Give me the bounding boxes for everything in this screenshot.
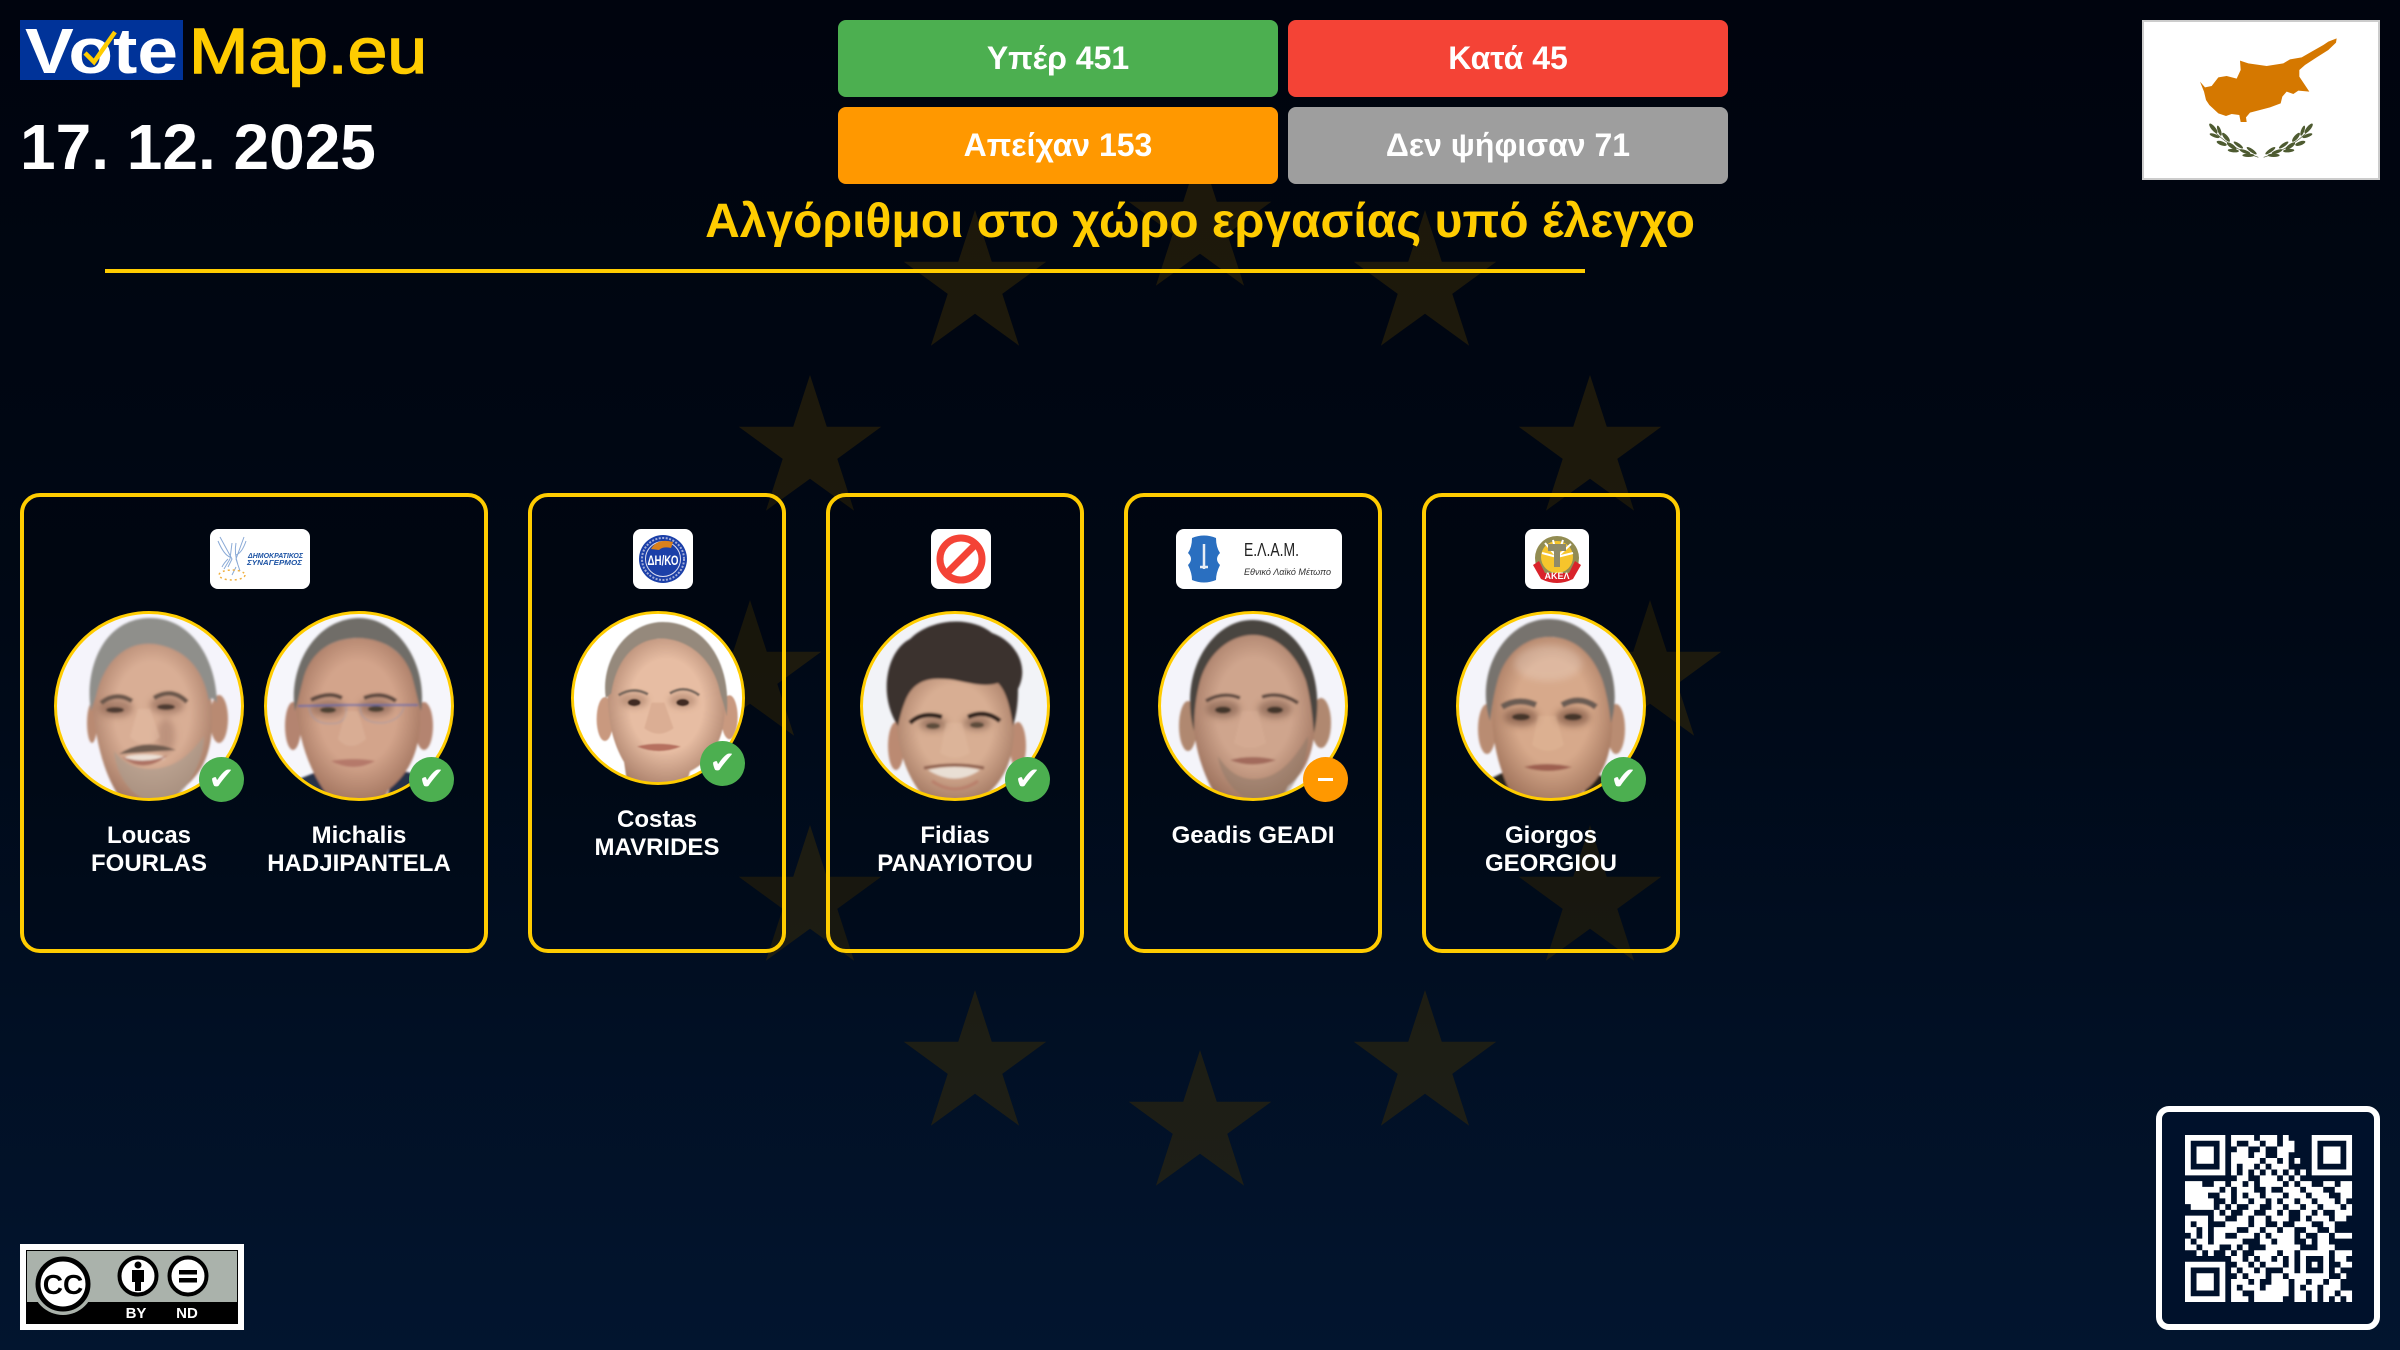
vote tally: in favour bbox=[838, 20, 1278, 97]
card: AKEL bbox=[1422, 493, 1680, 953]
card: no party bbox=[826, 493, 1084, 953]
party logo: DIKO: ΔΗ/ΚΟ bbox=[648, 552, 679, 568]
name: Giorgos Georgiou bbox=[1485, 822, 1617, 877]
date: 17. 12. 2025 bbox=[20, 111, 376, 183]
party logo: DISY: ΔΗΜΟΚΡΑΤΙΚΟΣ bbox=[247, 551, 304, 560]
name: Geadis Geadi: Geadis GEADI bbox=[1172, 822, 1334, 849]
flag of Cyprus bbox=[2142, 20, 2380, 180]
vote badge: in favour bbox=[1601, 757, 1646, 802]
party logo: ELAM bbox=[1176, 529, 1342, 589]
CC BY-ND licence badge: BY bbox=[126, 1305, 146, 1322]
portrait: Loucas Fourlas bbox=[54, 611, 244, 802]
vote badge: abstained bbox=[1303, 757, 1348, 802]
party logo: DIKO bbox=[633, 529, 693, 589]
name: Costas Mavrides bbox=[595, 806, 719, 861]
party logo: AKEL bbox=[1525, 529, 1589, 589]
logo: VoteMap.eu: Vote bbox=[25, 15, 178, 87]
party logo: DISY bbox=[210, 529, 310, 589]
name: Giorgos Georgiou: GEORGIOU bbox=[1485, 850, 1617, 877]
QR code bbox=[2156, 1106, 2380, 1330]
vote badge: in favour: ✔ bbox=[1014, 761, 1040, 797]
vote tally: against: Κατά 45 bbox=[1448, 40, 1568, 76]
name: Costas Mavrides: Costas bbox=[617, 806, 697, 833]
vote badge: in favour bbox=[199, 757, 244, 802]
card: DISY bbox=[20, 493, 488, 953]
portrait: Geadis Geadi bbox=[1158, 611, 1348, 802]
vote tally: did not vote: Δεν ψήφισαν 71 bbox=[1386, 127, 1630, 163]
vote tally: against bbox=[1288, 20, 1728, 97]
portrait: Giorgos Georgiou bbox=[1456, 611, 1646, 802]
party logo: AKEL: ΑΚΕΛ bbox=[1544, 571, 1570, 581]
CC BY-ND licence badge: ND bbox=[176, 1305, 198, 1322]
name: Loucas Fourlas: Loucas bbox=[107, 822, 191, 849]
name: Michalis Hadjipantela: HADJIPANTELA bbox=[267, 850, 451, 877]
portrait: Costas Mavrides bbox=[571, 611, 745, 786]
name: Michalis Hadjipantela: Michalis bbox=[312, 822, 406, 849]
portrait: Michalis Hadjipantela bbox=[264, 611, 454, 802]
card: ELAM bbox=[1124, 493, 1382, 953]
party logo: non-attached bbox=[931, 529, 991, 589]
party logo: ELAM: Ε.Λ.Α.Μ. bbox=[1244, 540, 1299, 560]
CC BY-ND licence badge bbox=[20, 1244, 244, 1330]
name: Fidias Panayiotou: PANAYIOTOU bbox=[877, 850, 1033, 877]
name: Loucas Fourlas: FOURLAS bbox=[91, 850, 207, 877]
portrait: Fidias Panayiotou bbox=[860, 611, 1050, 802]
name: Michalis Hadjipantela bbox=[267, 822, 451, 877]
vote badge: in favour bbox=[700, 741, 745, 786]
title: Αλγόριθμοι στο χώρο εργασίας υπό έλεγχο bbox=[705, 195, 1695, 248]
party logo: ELAM: Εθνικό Λαϊκό Μέτωπο bbox=[1244, 567, 1331, 578]
name: Costas Mavrides: MAVRIDES bbox=[595, 834, 719, 861]
vote tally: abstained: Απείχαν 153 bbox=[964, 127, 1152, 163]
vote badge: in favour bbox=[1005, 757, 1050, 802]
party logo: DISY: ΣΥΝΑΓΕΡΜΟΣ bbox=[246, 558, 303, 567]
card: DIKO bbox=[528, 493, 786, 953]
vote tally: abstained bbox=[838, 107, 1278, 184]
vote badge: in favour: ✔ bbox=[418, 761, 444, 797]
name: Fidias Panayiotou bbox=[877, 822, 1033, 877]
name: Loucas Fourlas bbox=[91, 822, 207, 877]
vote badge: in favour: ✔ bbox=[1610, 761, 1636, 797]
vote tally: in favour: Υπέρ 451 bbox=[987, 40, 1129, 76]
name: Giorgos Georgiou: Giorgos bbox=[1505, 822, 1597, 849]
vote badge: in favour bbox=[409, 757, 454, 802]
logo: VoteMap.eu: Map.eu bbox=[189, 15, 427, 87]
name: Fidias Panayiotou: Fidias bbox=[920, 822, 990, 849]
vote tally: did not vote bbox=[1288, 107, 1728, 184]
vote badge: in favour: ✔ bbox=[208, 761, 234, 797]
logo: VoteMap.eu bbox=[20, 15, 427, 88]
vote badge: in favour: ✔ bbox=[710, 745, 735, 781]
CC BY-ND licence badge: CC bbox=[43, 1269, 83, 1300]
